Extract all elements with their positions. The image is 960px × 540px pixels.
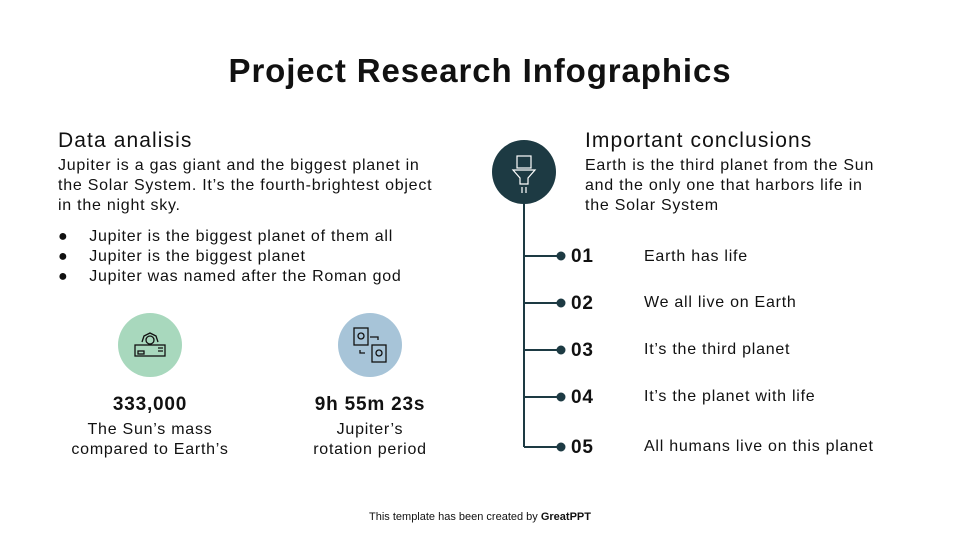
text: conclusions: Earth is the third planet from the Sun	[585, 157, 874, 174]
list items	[571, 246, 874, 458]
timeline	[492, 140, 566, 452]
icon: blue circle	[338, 313, 402, 377]
text: 05	[571, 437, 594, 458]
bullet list: ● Jupiter was named after the Roman god	[58, 268, 402, 285]
text: conclusions: the Solar System	[585, 197, 719, 214]
text: 04	[571, 387, 594, 408]
bullet list	[58, 228, 402, 285]
text: data analisis	[58, 157, 432, 214]
text: It’s the third planet	[644, 341, 790, 358]
heading: data analisis: Data analisis	[58, 129, 193, 152]
stat 1: The Sun’s mass	[88, 421, 212, 438]
heading: important conclusions: Important conclusions	[585, 129, 812, 152]
stat 2: rotation period	[313, 441, 427, 458]
bullet list: ● Jupiter is the biggest planet of them all	[58, 228, 393, 245]
stat 2	[313, 394, 427, 458]
text: It’s the planet with life	[644, 388, 815, 405]
text: conclusions	[585, 157, 874, 214]
text: 01	[571, 246, 594, 267]
text: Earth has life	[644, 248, 748, 265]
stat 1: compared to Earth’s	[71, 441, 229, 458]
stat 1: 333,000	[113, 394, 187, 415]
text: 02	[571, 293, 594, 314]
title: Project Research Infographics	[229, 52, 731, 89]
stat 2: 9h 55m 23s	[315, 394, 425, 415]
text: data analisis: the Solar System. It’s the fourth-brightest object	[58, 177, 432, 194]
text: data analisis: Jupiter is a gas giant and the biggest planet in	[58, 157, 420, 174]
text: data analisis: in the night sky.	[58, 197, 181, 214]
stat 1	[71, 394, 229, 458]
icon: green circle	[118, 313, 182, 377]
text: conclusions: and the only one that harbors life in	[585, 177, 863, 194]
text: We all live on Earth	[644, 294, 797, 311]
text: 03	[571, 340, 594, 361]
bullet list: ● Jupiter is the biggest planet	[58, 248, 306, 265]
footer: This template has been created by GreatPPT	[369, 511, 591, 523]
text: All humans live on this planet	[644, 438, 874, 455]
stat 2: Jupiter’s	[337, 421, 403, 438]
